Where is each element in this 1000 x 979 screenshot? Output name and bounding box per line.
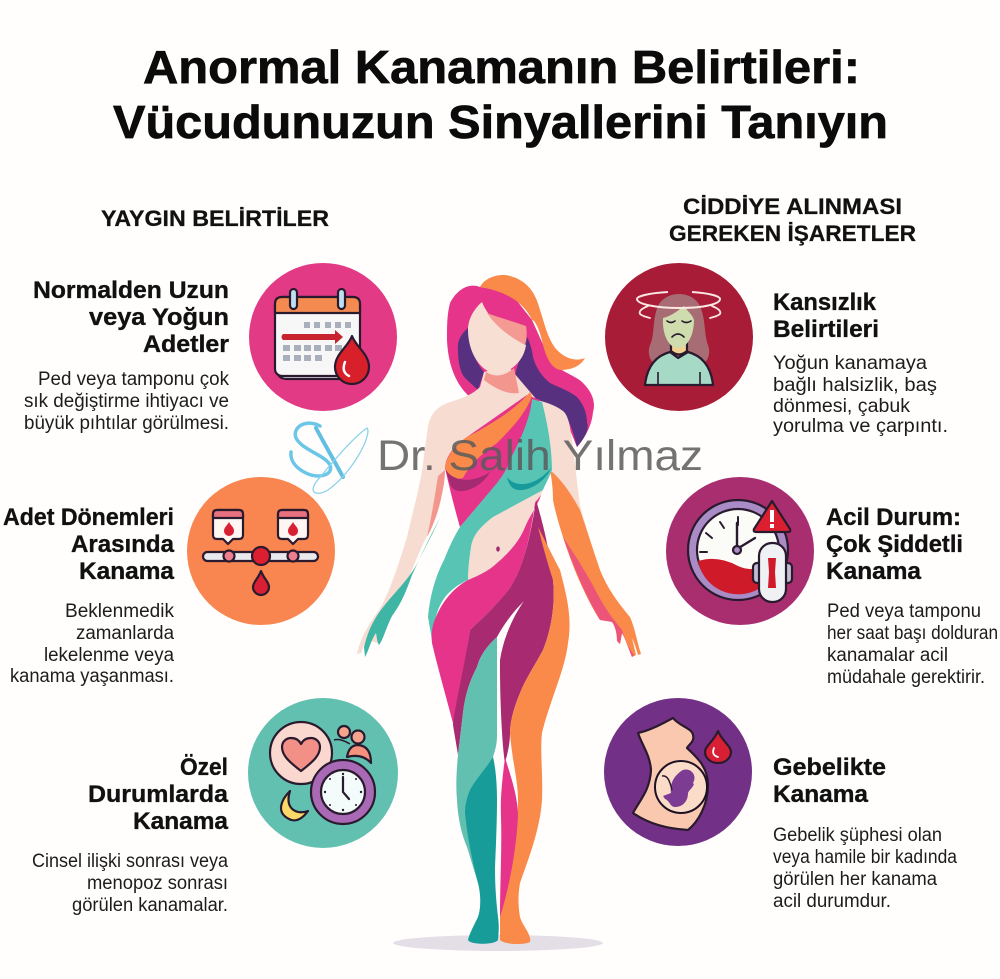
left arm salmon stripe	[427, 470, 445, 537]
teal leg light	[456, 637, 497, 883]
text block: bleeding between periods	[3, 504, 175, 687]
text block: bleeding between periods: zamanlarda	[76, 623, 174, 644]
title: Vücudunuzun Sinyallerini Tanıyın	[113, 96, 888, 148]
text block: anemia: Belirtileri	[773, 316, 879, 343]
text block: long or heavy periods: Adetler	[143, 331, 229, 358]
text block: bleeding between periods: kanama yaşanması.	[10, 666, 174, 687]
bust pink	[445, 395, 540, 527]
text block: bleeding in pregnancy: Kanama	[773, 781, 869, 808]
title	[113, 41, 888, 148]
left arm teal stripe	[364, 518, 440, 657]
text block: bleeding between periods: Adet Dönemleri	[3, 504, 174, 531]
text block: anemia: Kansızlık	[773, 289, 877, 316]
title: Anormal Kanamanın Belirtileri:	[143, 41, 860, 93]
teal diagonal	[428, 399, 552, 650]
pink hip	[432, 495, 541, 723]
text block: special situations: Özel	[180, 754, 228, 781]
text block: emergency: kanamalar acil	[827, 645, 948, 666]
text block: emergency: Ped veya tamponu	[827, 601, 981, 622]
text block: long or heavy periods: Ped veya tamponu çok	[38, 369, 229, 390]
text block: emergency: Kanama	[826, 558, 922, 585]
text block: anemia: yorulma ve çarpıntı.	[773, 416, 948, 437]
text block: bleeding between periods: Kanama	[79, 558, 175, 585]
heading: serious signs: CİDDİYE ALINMASI	[683, 194, 902, 219]
text block: emergency	[826, 504, 998, 688]
heading: common symptoms: YAYGIN BELİRTİLER	[101, 206, 329, 231]
text block: bleeding between periods: Beklenmedik	[65, 601, 174, 622]
navel	[496, 546, 500, 552]
orange right leg	[500, 527, 570, 944]
text block: anemia: bağlı halsizlik, baş	[773, 375, 937, 396]
midriff skin	[468, 490, 543, 580]
ground shadow	[393, 935, 603, 951]
text block: bleeding in pregnancy: görülen her kanama	[773, 869, 937, 890]
pink right calf	[500, 757, 518, 917]
heading: serious signs: GEREKEN İŞARETLER	[669, 221, 916, 246]
text block: special situations	[32, 754, 229, 916]
hair purple left	[458, 328, 484, 390]
text block: bleeding in pregnancy: Gebelikte	[773, 754, 886, 781]
text block: long or heavy periods: sık değiştirme ihtiyacı ve	[24, 391, 229, 412]
text block: emergency: müdahale gerektirir.	[827, 667, 985, 688]
text block: emergency: Çok Şiddetli	[826, 531, 963, 558]
text block: long or heavy periods	[24, 277, 229, 434]
text block: long or heavy periods: Normalden Uzun	[33, 277, 229, 304]
text block: special situations: Durumlarda	[88, 781, 229, 808]
right arm pink shade	[563, 537, 634, 657]
face	[468, 302, 526, 374]
text block: anemia: dönmesi, çabuk	[773, 396, 911, 417]
text block: bleeding in pregnancy: Gebelik şüphesi olan	[773, 825, 942, 846]
bust shadow teal	[507, 468, 551, 490]
icon: heart, clock, moon and couple	[248, 698, 398, 848]
heading: serious signs	[669, 194, 916, 246]
icon: calendar with blood drop	[249, 263, 397, 411]
neck shadow	[484, 368, 519, 393]
text block: special situations: menopoz sonrası	[87, 873, 228, 894]
watermark name: Dr. Salih Yılmaz	[377, 432, 703, 480]
text block: anemia: Yoğun kanamaya	[773, 353, 927, 374]
text block: long or heavy periods: büyük pıhtılar görülmesi.	[24, 413, 229, 434]
text block: anemia	[773, 289, 948, 437]
magenta panel	[453, 500, 554, 763]
icon: clock, warning and pad	[666, 477, 814, 625]
figure: woman silhouette	[357, 275, 641, 951]
icon: spotting between periods	[187, 477, 335, 625]
hair orange	[480, 275, 585, 370]
skin: shoulders and arms	[357, 366, 630, 654]
text block: bleeding in pregnancy: veya hamile bir kadında	[773, 847, 957, 868]
text block: long or heavy periods: veya Yoğun	[89, 304, 229, 331]
sash orange	[445, 392, 532, 479]
text block: bleeding in pregnancy	[773, 754, 957, 912]
text block: bleeding between periods: lekelenme veya	[44, 645, 174, 666]
watermark logo SV	[291, 423, 368, 493]
hair purple right	[515, 337, 588, 447]
right arm orange	[550, 470, 641, 657]
text block: special situations: Cinsel ilişki sonrası veya	[32, 851, 228, 872]
hair pink base	[447, 286, 594, 447]
text block: bleeding in pregnancy: acil durumdur.	[773, 891, 891, 912]
hair fringe salmon	[487, 313, 527, 345]
crotch gap	[497, 601, 524, 930]
icon: pregnant belly with fetus	[604, 698, 752, 846]
icon: dizzy woman with anemia	[605, 263, 753, 411]
text block: emergency: Acil Durum:	[826, 504, 961, 531]
text block: bleeding between periods: Arasında	[71, 531, 175, 558]
bust shadow magenta	[446, 470, 490, 491]
text block: special situations: Kanama	[133, 808, 229, 835]
text block: special situations: görülen kanamalar.	[72, 895, 228, 916]
teal leg dark	[465, 757, 499, 944]
